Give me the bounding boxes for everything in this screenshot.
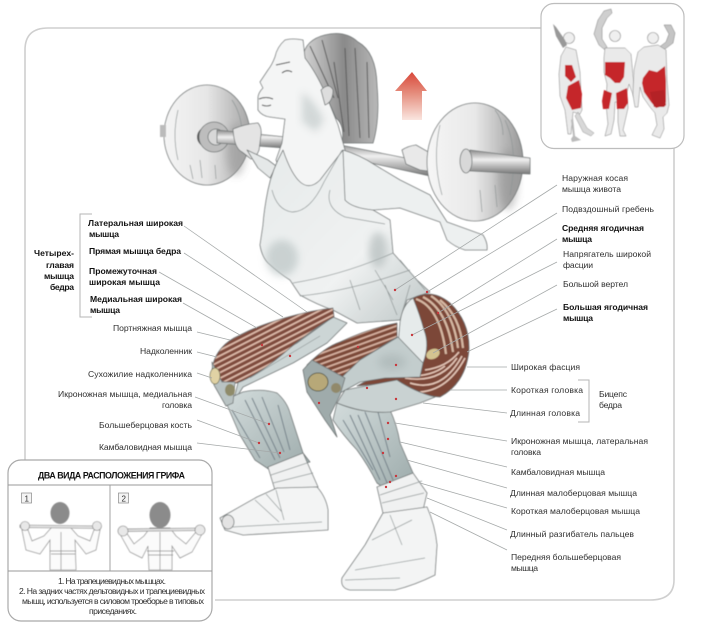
left bold labels: мышца	[89, 229, 119, 239]
inset caption: 1. На трапециевидных мышцах.	[58, 576, 166, 586]
left regular labels: Камбаловидная мышца	[99, 442, 192, 452]
left regular labels: Большеберцовая кость	[99, 420, 193, 430]
far quadriceps	[307, 323, 397, 379]
far knee	[303, 360, 345, 437]
right arm	[343, 150, 487, 250]
far inner thigh	[326, 337, 423, 413]
inset caption	[19, 576, 206, 616]
left bold labels: Прямая мышца бедра	[89, 246, 181, 256]
group label: biceps femoris: бедра	[599, 400, 622, 410]
left bold labels: Латеральная широкая	[88, 218, 183, 228]
leader lines	[159, 185, 557, 550]
near thigh inner	[233, 317, 347, 403]
right upper labels: Наружная косая	[562, 173, 628, 183]
muscle marker dots	[258, 289, 439, 488]
glute and hamstring muscle	[357, 294, 469, 397]
near quadriceps	[212, 308, 334, 383]
right lower labels: Икроножная мышца, латеральная	[511, 436, 648, 446]
right bar stub	[460, 149, 530, 174]
right lower labels: головка	[511, 447, 541, 457]
right upper labels: мышца	[563, 313, 593, 323]
right upper labels: мышца живота	[562, 184, 621, 194]
up arrow	[395, 72, 427, 120]
right upper labels: Большой вертел	[563, 279, 628, 289]
left bold labels: Промежуточная	[89, 266, 157, 276]
side figure	[553, 24, 594, 142]
right lower labels: Короткая головка	[511, 385, 583, 395]
hamstring lower	[337, 380, 435, 412]
right upper labels	[562, 173, 655, 323]
inset caption: мышц, используется в силовом троеборье в типовых	[22, 596, 205, 606]
left hand	[233, 123, 261, 159]
bracket: biceps femoris	[578, 380, 589, 422]
number boxes: 2	[122, 494, 126, 504]
left regular labels: Портняжная мышца	[113, 323, 192, 333]
front figure	[594, 9, 637, 136]
right lower labels	[510, 362, 648, 573]
left bold labels: широкая мышца	[89, 277, 160, 287]
group label: biceps femoris: Бицепс	[599, 389, 628, 399]
left bold labels: Медиальная широкая	[90, 294, 182, 304]
glute lower fibres	[400, 352, 465, 392]
right lower labels: Широкая фасция	[511, 362, 580, 372]
right hand	[402, 145, 430, 171]
inset caption: приседаниях.	[89, 606, 137, 616]
inset frame	[8, 460, 212, 621]
glute tan fibres	[416, 296, 463, 354]
inset frame	[541, 4, 684, 148]
right lower labels: Длинная малоберцовая мышца	[510, 488, 637, 498]
left bar section	[217, 130, 285, 148]
illustration: woman squatting with barbell	[160, 34, 530, 590]
left regular labels	[58, 323, 193, 452]
right lower labels: Передняя большеберцовая	[511, 552, 621, 562]
group label: quadriceps: Четырех-	[34, 248, 74, 258]
right lower labels: мышца	[511, 563, 538, 573]
hip white muscle	[398, 298, 427, 363]
group label: quadriceps	[34, 248, 74, 292]
left regular labels: Сухожилие надколенника	[88, 369, 192, 379]
right upper labels: Подвздошный гребень	[562, 204, 655, 214]
right lower labels: Длинный разгибатель пальцев	[510, 529, 634, 539]
left regular labels: Надколенник	[140, 346, 192, 356]
inset: muscle figures	[530, 4, 684, 148]
figure 1: bar on trapezius	[20, 502, 102, 570]
figure 2: bar on rear deltoids	[118, 502, 205, 570]
right lower labels: Камбаловидная мышца	[511, 467, 605, 477]
right upper labels: Средняя ягодичная	[562, 223, 644, 233]
group label: quadriceps: главая	[46, 260, 74, 270]
right upper labels: Напрягатель широкой	[563, 249, 651, 259]
near shoe	[220, 487, 328, 535]
torso	[260, 150, 430, 323]
right lower labels: Короткая малоберцовая мышца	[511, 506, 640, 516]
near knee	[212, 362, 235, 406]
right plate	[427, 103, 523, 221]
right upper labels: Большая ягодичная	[563, 302, 648, 312]
face and neck	[258, 39, 345, 205]
group label: biceps femoris	[599, 389, 628, 410]
near calf	[225, 390, 310, 470]
far leg: calf	[333, 403, 413, 490]
left plate	[164, 85, 250, 185]
number boxes: 1	[24, 494, 30, 504]
right upper labels: мышца	[562, 234, 592, 244]
left bold labels: мышца	[90, 305, 120, 315]
far sock	[377, 473, 427, 513]
inset: two bar positions	[8, 460, 212, 621]
number boxes	[22, 493, 128, 504]
left arm behind	[247, 150, 276, 178]
right lower labels: Длинная головка	[510, 408, 580, 418]
left regular labels: Икроножная мышца, медиальная	[58, 389, 192, 399]
right upper labels: фасции	[563, 260, 593, 270]
group label: quadriceps: мышца	[44, 271, 74, 281]
inset title: ДВА ВИДА РАСПОЛОЖЕНИЯ ГРИФА	[38, 470, 186, 480]
bracket: quadriceps	[80, 214, 92, 317]
ponytail and hair	[303, 34, 378, 143]
group label: quadriceps: бедра	[50, 282, 74, 292]
inset caption: 2. На задних частях дельтовидных и трапециевидных	[19, 586, 206, 596]
far shoe	[342, 507, 437, 590]
near sock	[268, 453, 318, 490]
barbell	[160, 85, 430, 185]
left regular labels: головка	[162, 400, 192, 410]
right bar section	[330, 143, 430, 176]
left bold labels	[88, 218, 183, 315]
ear	[321, 86, 333, 105]
back figure	[633, 25, 675, 138]
